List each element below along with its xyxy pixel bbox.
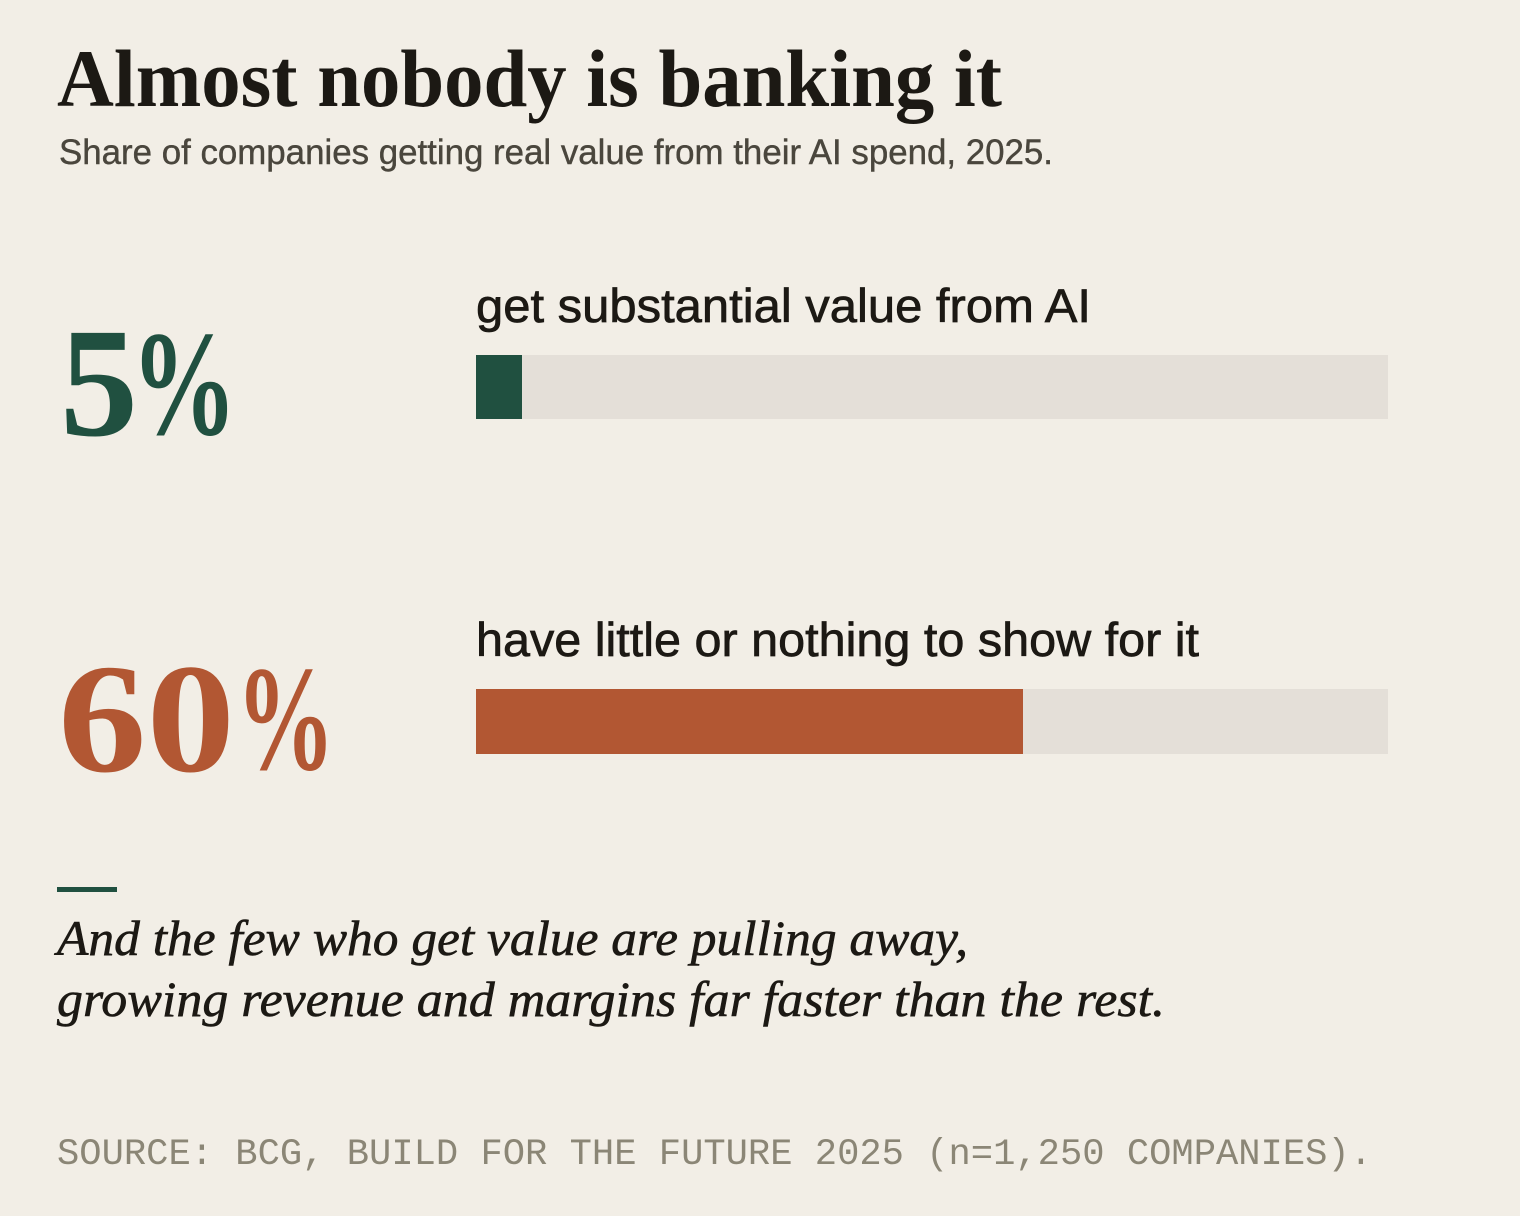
stat label: have little or nothing to show for it (476, 613, 1199, 666)
stat label: get substantial value from AI (476, 279, 1091, 332)
stat value: 60% (58, 632, 335, 805)
stat value: 60%: 60 (58, 632, 235, 805)
stat value: 5% (60, 296, 237, 469)
progress bar: 5 percent (476, 355, 1388, 419)
stat row: 60 percent (58, 613, 1388, 805)
source note: SOURCE: BCG, BUILD FOR THE FUTURE 2025 (n=1,250 COMPANIES). (57, 1134, 1372, 1176)
stat value: 60%: % (236, 636, 335, 802)
closing statement (54, 910, 1165, 1027)
title: Almost nobody is banking it (57, 33, 1002, 124)
closing statement: growing revenue and margins far faster than the rest. (57, 971, 1165, 1027)
stat row: 5 percent (60, 279, 1388, 469)
closing statement: And the few who get value are pulling away, (54, 910, 968, 966)
accent rule (57, 887, 117, 892)
stat value: 5%: 5 (60, 296, 138, 469)
progress bar: 60 percent (476, 689, 1388, 754)
subtitle: Share of companies getting real value from their AI spend, 2025. (59, 133, 1053, 172)
stat value: 5%: % (131, 301, 237, 467)
